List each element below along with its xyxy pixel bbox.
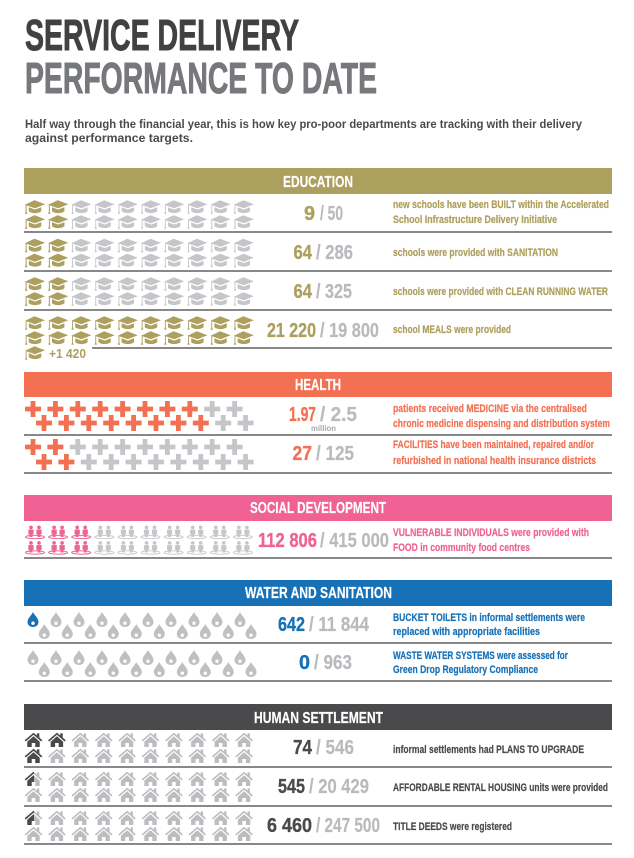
row: schools with sanitation: / 286 xyxy=(316,241,353,264)
row: school meals: 21 220 xyxy=(267,319,316,342)
row: patients received medicine xyxy=(24,401,612,435)
panel: water and sanitation xyxy=(24,580,612,681)
row: title deeds: / 247 500 xyxy=(316,814,380,837)
row: school meals xyxy=(25,316,612,361)
row: waste water systems xyxy=(24,650,612,681)
heading: education xyxy=(24,168,612,194)
row: schools with sanitation: schools were provided with SANITATION xyxy=(393,247,558,259)
row: bucket toilets: replaced with appropriate facilities xyxy=(393,626,540,638)
row: facilities maintained: / 125 xyxy=(316,442,354,465)
row: schools with clean running water: 64 xyxy=(294,280,312,303)
heading: human settlement xyxy=(24,704,612,730)
heading: health xyxy=(24,372,612,397)
title xyxy=(25,11,377,103)
row: waste water systems: / 963 xyxy=(314,651,352,674)
heading: water and sanitation xyxy=(24,580,612,606)
row: schools with clean running water xyxy=(24,277,612,310)
row: informal settlements upgrade plans: informal settlements had PLANS TO UPGRADE xyxy=(393,744,584,756)
heading: social development xyxy=(24,495,612,521)
row: vulnerable individuals: / 415 000 xyxy=(320,529,389,552)
row: vulnerable individuals: FOOD in community food centres xyxy=(393,542,530,554)
row: schools with clean running water: / 325 xyxy=(316,280,352,303)
row: schools with sanitation xyxy=(24,239,612,271)
row: bucket toilets xyxy=(24,612,612,643)
heading: human settlement: HUMAN SETTLEMENT xyxy=(254,710,383,727)
heading: water and sanitation: WATER AND SANITATION xyxy=(245,585,392,602)
row: informal settlements upgrade plans: / 546 xyxy=(316,736,354,759)
row: title deeds: TITLE DEEDS were registered xyxy=(393,821,512,833)
intro text: Half way through the financial year, this is how key pro-poor departments are tracking with their delivery xyxy=(25,119,583,131)
intro text: against performance targets. xyxy=(25,133,193,145)
row: school meals: school MEALS were provided xyxy=(393,324,511,336)
row: new schools built: / 50 xyxy=(320,202,343,225)
row: bucket toilets: BUCKET TOILETS in informal settlements were xyxy=(393,612,585,624)
row: facilities maintained: 27 xyxy=(292,442,312,465)
row: vulnerable individuals: 112 806 xyxy=(258,529,317,552)
row: school meals: / 19 800 xyxy=(320,319,379,342)
row: waste water systems: Green Drop Regulatory Compliance xyxy=(393,664,538,676)
row: waste water systems: 0 xyxy=(299,651,310,674)
row: bucket toilets: / 11 844 xyxy=(309,613,369,636)
row: title deeds: 6 460 xyxy=(267,814,312,837)
row: affordable rental housing xyxy=(24,772,612,806)
panel: health xyxy=(24,372,612,473)
panel: social development xyxy=(24,495,612,558)
row: patients received medicine: 1.97 xyxy=(289,403,316,426)
row: patients received medicine: million xyxy=(311,423,336,433)
row: new schools built xyxy=(24,199,612,232)
row: bucket toilets: 642 xyxy=(278,613,305,636)
row: new schools built: 9 xyxy=(304,202,315,225)
row: facilities maintained xyxy=(24,439,612,473)
title: PERFORMANCE TO DATE xyxy=(25,54,377,103)
heading: health: HEALTH xyxy=(295,377,341,394)
intro text xyxy=(25,119,583,145)
row: waste water systems: WASTE WATER SYSTEMS were assessed for xyxy=(393,650,569,662)
row: patients received medicine: patients received MEDICINE via the centralised xyxy=(393,403,587,415)
row: affordable rental housing: 545 xyxy=(278,775,305,798)
row: new schools built: School Infrastructure Delivery Initiative xyxy=(393,214,557,226)
heading: social development: SOCIAL DEVELOPMENT xyxy=(250,500,386,517)
row: title deeds xyxy=(24,811,612,844)
row: affordable rental housing: / 20 429 xyxy=(309,775,369,798)
title: SERVICE DELIVERY xyxy=(25,11,299,60)
row: vulnerable individuals xyxy=(24,526,612,558)
panel: education xyxy=(24,168,612,361)
heading: education: EDUCATION xyxy=(283,174,353,191)
row: school meals: +1 420 xyxy=(49,346,86,361)
row: informal settlements upgrade plans: 74 xyxy=(293,736,312,759)
row: patients received medicine: / 2.5 xyxy=(320,403,357,426)
row: informal settlements upgrade plans xyxy=(24,733,612,767)
panel: human settlement xyxy=(24,704,612,844)
row: schools with sanitation: 64 xyxy=(294,241,312,264)
